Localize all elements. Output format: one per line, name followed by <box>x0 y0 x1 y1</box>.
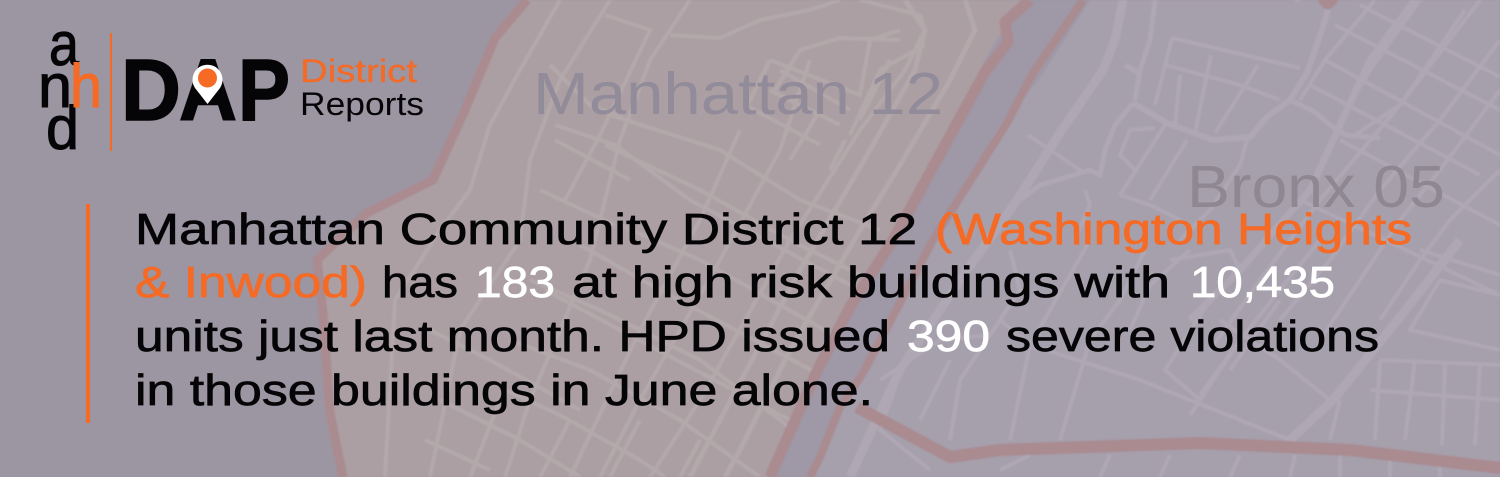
map area: Manhattan 12 <box>317 0 1020 477</box>
logo wordmark: DAP: P <box>238 42 290 139</box>
logo letters: and: n <box>38 52 72 120</box>
streets: Manhattan <box>385 0 975 477</box>
line 2: 183 <box>475 258 555 307</box>
logo: and/h/DAP District Reports <box>38 10 424 162</box>
icon: map pin <box>192 65 223 104</box>
map background <box>312 0 1500 477</box>
line 3 <box>135 312 1379 361</box>
line 3: 390 <box>907 312 990 361</box>
accent bar <box>86 204 90 423</box>
line 2: 10,435 <box>1190 258 1335 307</box>
map label: Bronx 05: Bronx 05 <box>1187 154 1445 220</box>
logo wordmark: DAP: D <box>121 42 181 139</box>
district boundaries <box>317 0 1500 477</box>
line 2: & Inwood) <box>135 258 367 307</box>
logo letters: and: d <box>46 94 79 162</box>
line 2 <box>135 258 1335 307</box>
line 1: Manhattan Community District 12 <box>135 205 917 254</box>
logo text: Reports: Reports <box>300 86 424 122</box>
streets: Bronx <box>850 0 1500 477</box>
line 3: units just last month. HPD issued <box>135 312 890 361</box>
line 4: in those buildings in June alone. <box>135 366 873 415</box>
line 3: severe violations <box>1006 312 1379 361</box>
line 2: has <box>382 258 458 307</box>
logo divider <box>110 33 112 151</box>
logo text: District: District <box>300 53 417 89</box>
line 1: (Washington Heights <box>935 205 1412 254</box>
logo letters: and: a <box>49 10 79 78</box>
logo wordmark: DAP: A <box>179 42 237 139</box>
river strip <box>760 0 1100 477</box>
logo wordmark: DAP <box>121 42 290 139</box>
summary text <box>135 205 1412 415</box>
logo letter: orange h: h <box>70 52 102 120</box>
line 2: at high risk buildings with <box>572 258 1170 307</box>
map label: Manhattan 12: Manhattan 12 <box>533 61 943 127</box>
line 1 <box>135 205 1412 254</box>
logo letters: and <box>38 10 79 162</box>
map area: Bronx 05 <box>810 0 1500 477</box>
